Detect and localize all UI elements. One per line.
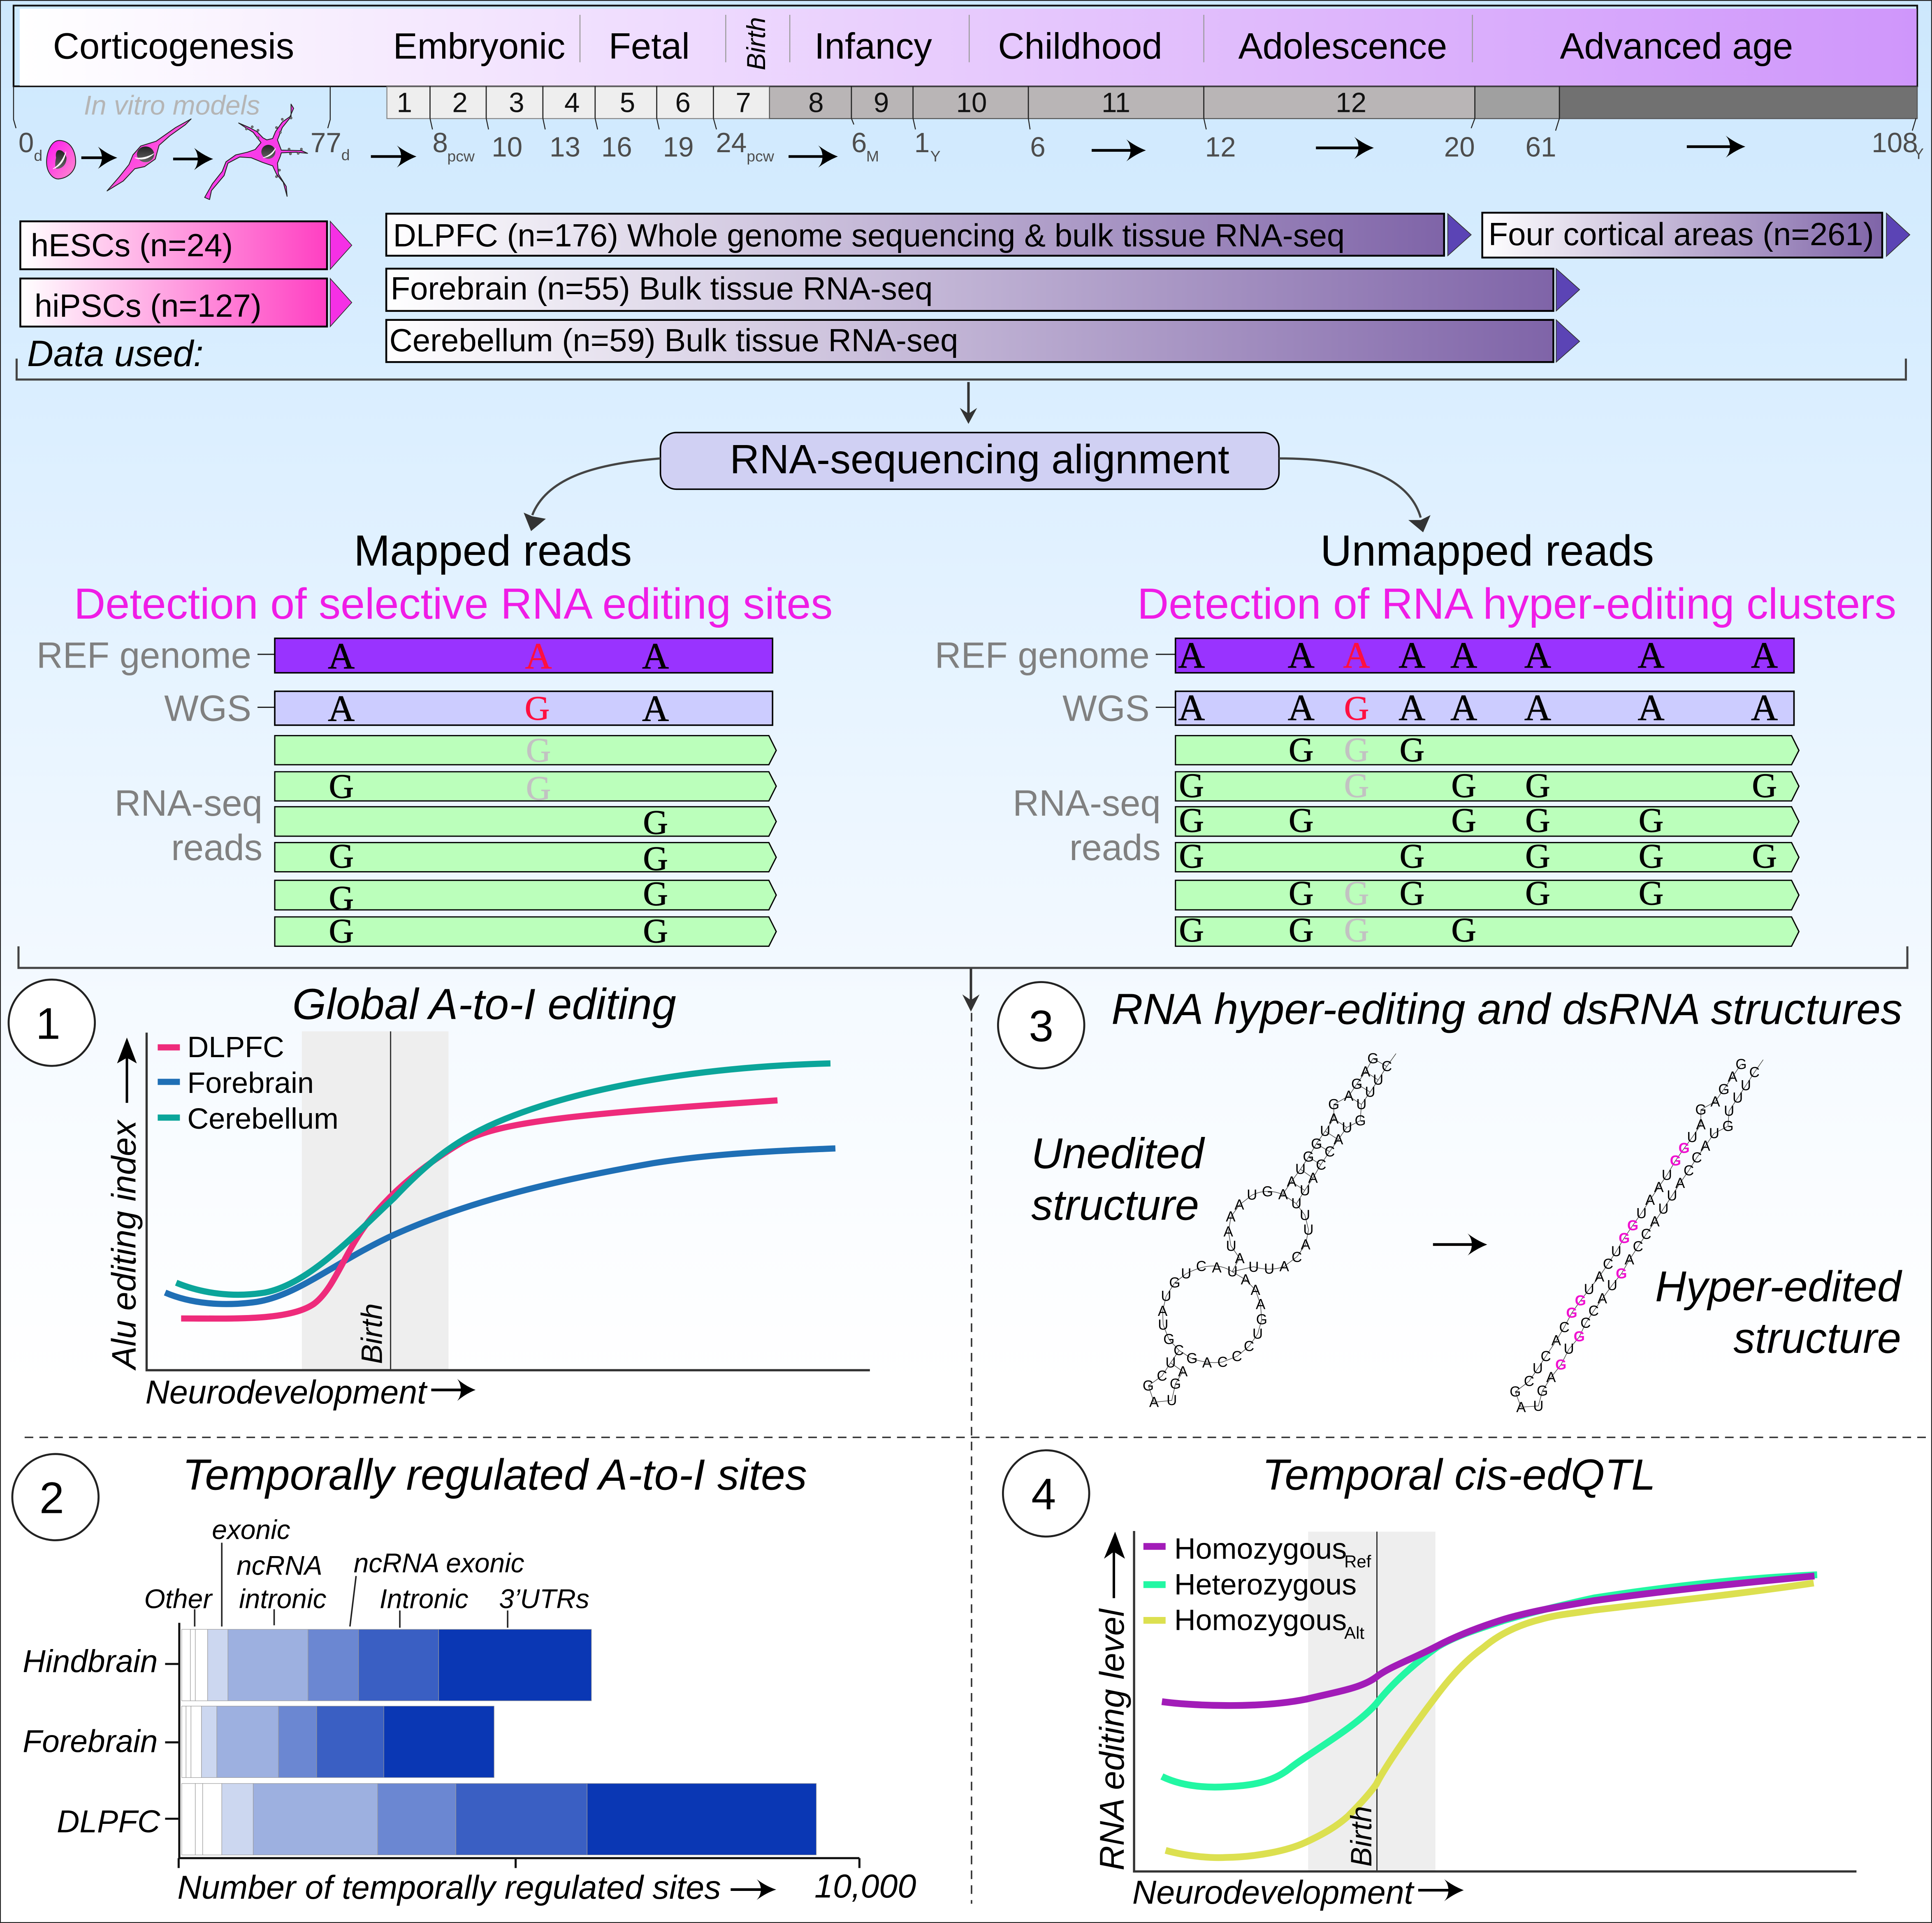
alignment: selective sites: AA: [328, 636, 669, 677]
alignment: hyper-editing clusters: reads: [1069, 827, 1161, 868]
panel 4: temporal cis-edQTL: 4: [1031, 1469, 1056, 1519]
panel 4: temporal cis-edQTL: Homozygous: [1174, 1532, 1347, 1565]
panel 2: temporally regulated sites: Hindbrain: [23, 1644, 158, 1679]
alignment: hyper-editing clusters: WGS: [1062, 688, 1150, 728]
timeline age labels: M: [866, 147, 879, 165]
panel 4: temporal cis-edQTL: Ref: [1344, 1552, 1371, 1571]
data used label: Data used:: [27, 333, 204, 374]
hyper-edited RNA structure: GCAUGUAUGGAUUACCUAAUAUUACCUACAUUACCCAUCUACGGAU: [1510, 1056, 1760, 1415]
timeline ticks: [14, 86, 1916, 131]
timeline header: developmental stages: Infancy: [814, 26, 932, 66]
timeline age labels: 19: [663, 132, 694, 163]
timeline age labels: d: [341, 146, 350, 164]
panel 2: temporally regulated sites: [12, 1451, 916, 1906]
unedited RNA structure: GCAUGUAUGGAUUAGCGCUAAUAUGUAAAUAUUACAUUUAACUGUAUGCGACCCUGAAUACGGAU: [1143, 1051, 1392, 1410]
panel 1: global A-to-I editing: Forebrain: [187, 1067, 314, 1100]
alignment: selective sites: G: [329, 768, 354, 806]
timeline age labels: 61: [1525, 132, 1556, 163]
data: DLPFC bar: DLPFC (n=176) Whole genome sequencing & bulk tissue RNA-seq: [393, 217, 1345, 253]
alignment: selective sites: G: [525, 689, 550, 727]
timeline header: developmental stages: Adolescence: [1239, 26, 1447, 66]
heading: detection of hyper-editing: Detection of RNA hyper-editing clusters: [1137, 580, 1896, 628]
timeline stage period boxes 1-12: 5: [620, 88, 635, 118]
dashed dividers: [25, 1013, 1932, 1904]
DLPFC bar: [182, 1784, 816, 1855]
RNA-sequencing alignment box: [661, 433, 1279, 489]
alignment: hyper-editing clusters: GGG: [1179, 911, 1476, 949]
timeline age labels: d: [34, 147, 42, 164]
data: four cortical areas bar: Four cortical areas (n=261): [1489, 216, 1874, 252]
arrow down to panels: [963, 969, 979, 1011]
timeline stage period boxes 1-12: 10: [956, 88, 987, 118]
panel 1: global A-to-I editing: Alu editing index: [105, 1119, 143, 1371]
timeline age labels: [19, 128, 1924, 165]
alignment: hyper-editing clusters: A: [1343, 635, 1370, 676]
panel 1: global A-to-I editing: Cerebellum: [187, 1102, 339, 1135]
panel 2: temporally regulated sites: 2: [39, 1473, 64, 1523]
alignment: hyper-editing clusters: [935, 635, 1799, 949]
timeline header: developmental stages: Embryonic: [393, 26, 565, 66]
data: forebrain bar: [386, 269, 1579, 311]
timeline stage period boxes 1-12: 6: [675, 88, 691, 118]
panel 2: temporally regulated sites: Other: [144, 1583, 213, 1614]
timeline stage period boxes 1-12: 1: [397, 88, 412, 118]
alignment: hyper-editing clusters: G: [1344, 731, 1369, 769]
timeline age labels: pcw: [447, 147, 475, 165]
panel 3: RNA hyper-editing and dsRNA structures: 3: [1029, 1001, 1053, 1051]
panel 3: RNA hyper-editing and dsRNA structures: [998, 982, 1903, 1415]
panel 1: global A-to-I editing: [9, 980, 870, 1411]
timeline age labels: 8: [432, 128, 448, 158]
timeline age labels: 1: [914, 128, 930, 158]
panel 4: temporal cis-edQTL: Temporal cis-edQTL: [1262, 1451, 1656, 1499]
timeline stage period boxes 1-12: 7: [735, 88, 751, 118]
data: hESCs box: [20, 221, 352, 269]
heading: detection of selective sites: Detection of selective RNA editing sites: [74, 580, 833, 628]
alignment: hyper-editing clusters: GGGGG: [1179, 801, 1663, 840]
alignment: hyper-editing clusters: GG: [1289, 731, 1424, 769]
curved arrow to unmapped reads: [1279, 458, 1431, 532]
curved arrow to mapped reads: [524, 458, 661, 531]
panel 2: temporally regulated sites: Intronic: [380, 1583, 469, 1614]
hyper-edited RNA structure: GGGGGGGGG: [1555, 1140, 1690, 1373]
alignment: selective sites: G: [329, 837, 354, 875]
hindbrain bar: [182, 1629, 591, 1701]
data: hiPSCs box: hiPSCs (n=127): [35, 288, 262, 324]
timeline age labels: 77: [311, 128, 341, 158]
timeline header: developmental stages: Childhood: [998, 26, 1162, 66]
icon: stem cell: [46, 141, 76, 179]
timeline header: developmental stages: Corticogenesis: [53, 26, 294, 66]
timeline stage period boxes 1-12: 9: [874, 88, 889, 118]
alignment: selective sites: reads: [171, 827, 262, 868]
alignment: selective sites: WGS: [164, 688, 251, 728]
panel 2: temporally regulated sites: Number of temporally regulated sites: [177, 1869, 721, 1906]
timeline stage period boxes 1-12: 3: [509, 88, 524, 118]
timeline stage period boxes 1-12: 11: [1102, 88, 1130, 118]
alignment: selective sites: AA: [328, 688, 669, 729]
heading: mapped reads: Mapped reads: [354, 527, 632, 575]
alignment: hyper-editing clusters: GGGG: [1289, 874, 1663, 912]
alignment: hyper-editing clusters: AAAAAAA: [1178, 687, 1778, 728]
in vitro models label: In vitro models: [84, 90, 260, 121]
timeline age labels: 20: [1444, 132, 1475, 163]
panel 2: temporally regulated sites: intronic: [239, 1583, 327, 1614]
panel 3: RNA hyper-editing and dsRNA structures: RNA hyper-editing and dsRNA structures: [1111, 985, 1902, 1033]
data: hiPSCs box: [20, 278, 352, 327]
timeline age labels: 10: [492, 132, 522, 163]
data bracket: [16, 359, 1906, 380]
timeline age labels: pcw: [747, 147, 775, 165]
panel 4: temporal cis-edQTL: Birth: [1345, 1806, 1378, 1867]
timeline header: developmental stages: Advanced age: [1560, 26, 1793, 66]
timeline age labels: 0: [19, 128, 34, 158]
alignment: selective sites: G: [643, 840, 668, 878]
timeline age labels: 6: [851, 128, 867, 158]
panel 4: temporal cis-edQTL: RNA editing level: [1093, 1608, 1131, 1870]
timeline age labels: 16: [601, 132, 632, 163]
alignment: hyper-editing clusters: REF genome: [935, 635, 1150, 676]
alignment: hyper-editing clusters: RNA-seq: [1013, 783, 1161, 823]
alignment: selective sites: G: [643, 803, 668, 842]
timeline header: developmental stages: Fetal: [609, 26, 690, 66]
panel 2: temporally regulated sites: Forebrain: [23, 1724, 158, 1759]
timeline age labels: 6: [1030, 132, 1046, 163]
alignment: selective sites: G: [329, 879, 354, 917]
panel 2: temporally regulated sites: exonic: [212, 1515, 290, 1545]
data: hESCs box: hESCs (n=24): [31, 227, 233, 263]
panel 2: temporally regulated sites: 3’UTRs: [499, 1583, 589, 1614]
alignment: selective sites: RNA-seq: [114, 783, 262, 823]
alignment: hyper-editing clusters: G: [1344, 911, 1369, 949]
alignment: selective sites: G: [526, 731, 551, 769]
timeline age labels: 12: [1205, 132, 1236, 163]
panel 1: global A-to-I editing: Global A-to-I editing: [292, 980, 676, 1028]
alignment: hyper-editing clusters: GGGGG: [1179, 837, 1777, 875]
arrows on timeline: [81, 136, 1745, 170]
timeline stage period boxes 1-12: 4: [564, 88, 580, 118]
forebrain bar: [182, 1706, 494, 1777]
timeline stage period boxes 1-12: 8: [808, 88, 824, 118]
alignment: selective sites: A: [525, 636, 552, 677]
timeline stage period boxes 1-12: 2: [452, 88, 468, 118]
alignment bracket: [19, 946, 1907, 968]
alignment: selective sites: G: [526, 769, 551, 807]
panel 1: global A-to-I editing: 1: [36, 998, 60, 1048]
icon: progenitor cell: [107, 119, 191, 191]
icon: neuron: [205, 104, 308, 199]
panel 4: temporal cis-edQTL: Heterozygous: [1174, 1568, 1357, 1601]
alignment: hyper-editing clusters: G: [1344, 689, 1369, 727]
alignment: hyper-editing clusters: G: [1344, 767, 1369, 805]
timeline stage period boxes 1-12: 12: [1336, 88, 1366, 118]
panel 2: temporally regulated sites: 10,000: [814, 1868, 916, 1905]
panel 1: global A-to-I editing: DLPFC: [187, 1031, 284, 1064]
timeline age labels: Y: [1913, 145, 1924, 162]
timeline age labels: 13: [550, 132, 580, 163]
data: cerebellum bar: Cerebellum (n=59) Bulk tissue RNA-seq: [390, 322, 958, 358]
panel 3: RNA hyper-editing and dsRNA structures: structure: [1733, 1314, 1901, 1362]
alignment: selective sites: [37, 635, 776, 950]
panel 2: temporally regulated sites: ncRNA: [237, 1550, 322, 1580]
RNA-sequencing alignment box: RNA-sequencing alignment: [730, 436, 1229, 482]
data: forebrain bar: Forebrain (n=55) Bulk tissue RNA-seq: [391, 270, 933, 306]
alignment: selective sites: G: [643, 875, 668, 913]
timeline age labels: 108: [1872, 128, 1918, 158]
panel 2: temporally regulated sites: Temporally regulated A-to-I sites: [182, 1451, 807, 1499]
alignment: hyper-editing clusters: GGGG: [1179, 767, 1777, 805]
panel 1: global A-to-I editing: Birth: [356, 1303, 389, 1364]
panel 4: temporal cis-edQTL: [1003, 1450, 1856, 1911]
alignment: hyper-editing clusters: G: [1344, 874, 1369, 912]
panel 4: temporal cis-edQTL: Alt: [1344, 1623, 1364, 1642]
data: cerebellum bar: [386, 320, 1579, 362]
panel 2: temporally regulated sites: DLPFC: [57, 1804, 160, 1839]
timeline age labels: Y: [930, 147, 941, 165]
timeline header: developmental stages: [14, 6, 1917, 86]
panel 3: RNA hyper-editing and dsRNA structures: Unedited: [1031, 1130, 1206, 1178]
panel 4: temporal cis-edQTL: Neurodevelopment: [1132, 1874, 1415, 1911]
timeline header: developmental stages: Birth: [742, 17, 771, 70]
panel 1: global A-to-I editing: Neurodevelopment: [145, 1374, 428, 1411]
arrow down to alignment: [960, 382, 977, 424]
alignment: selective sites: GG: [329, 912, 668, 950]
heading: unmapped reads: Unmapped reads: [1320, 527, 1654, 575]
panel 3: RNA hyper-editing and dsRNA structures: Hyper-edited: [1655, 1262, 1903, 1311]
panel 4: temporal cis-edQTL: Homozygous: [1174, 1604, 1347, 1637]
timeline stage period boxes 1-12: [387, 86, 1917, 118]
alignment: hyper-editing clusters: AAAAAAA: [1178, 635, 1778, 676]
panel 3: RNA hyper-editing and dsRNA structures: structure: [1031, 1181, 1199, 1229]
timeline age labels: 24: [716, 128, 747, 158]
panel 2: temporally regulated sites: ncRNA exonic: [354, 1547, 524, 1578]
alignment: selective sites: REF genome: [37, 635, 251, 676]
